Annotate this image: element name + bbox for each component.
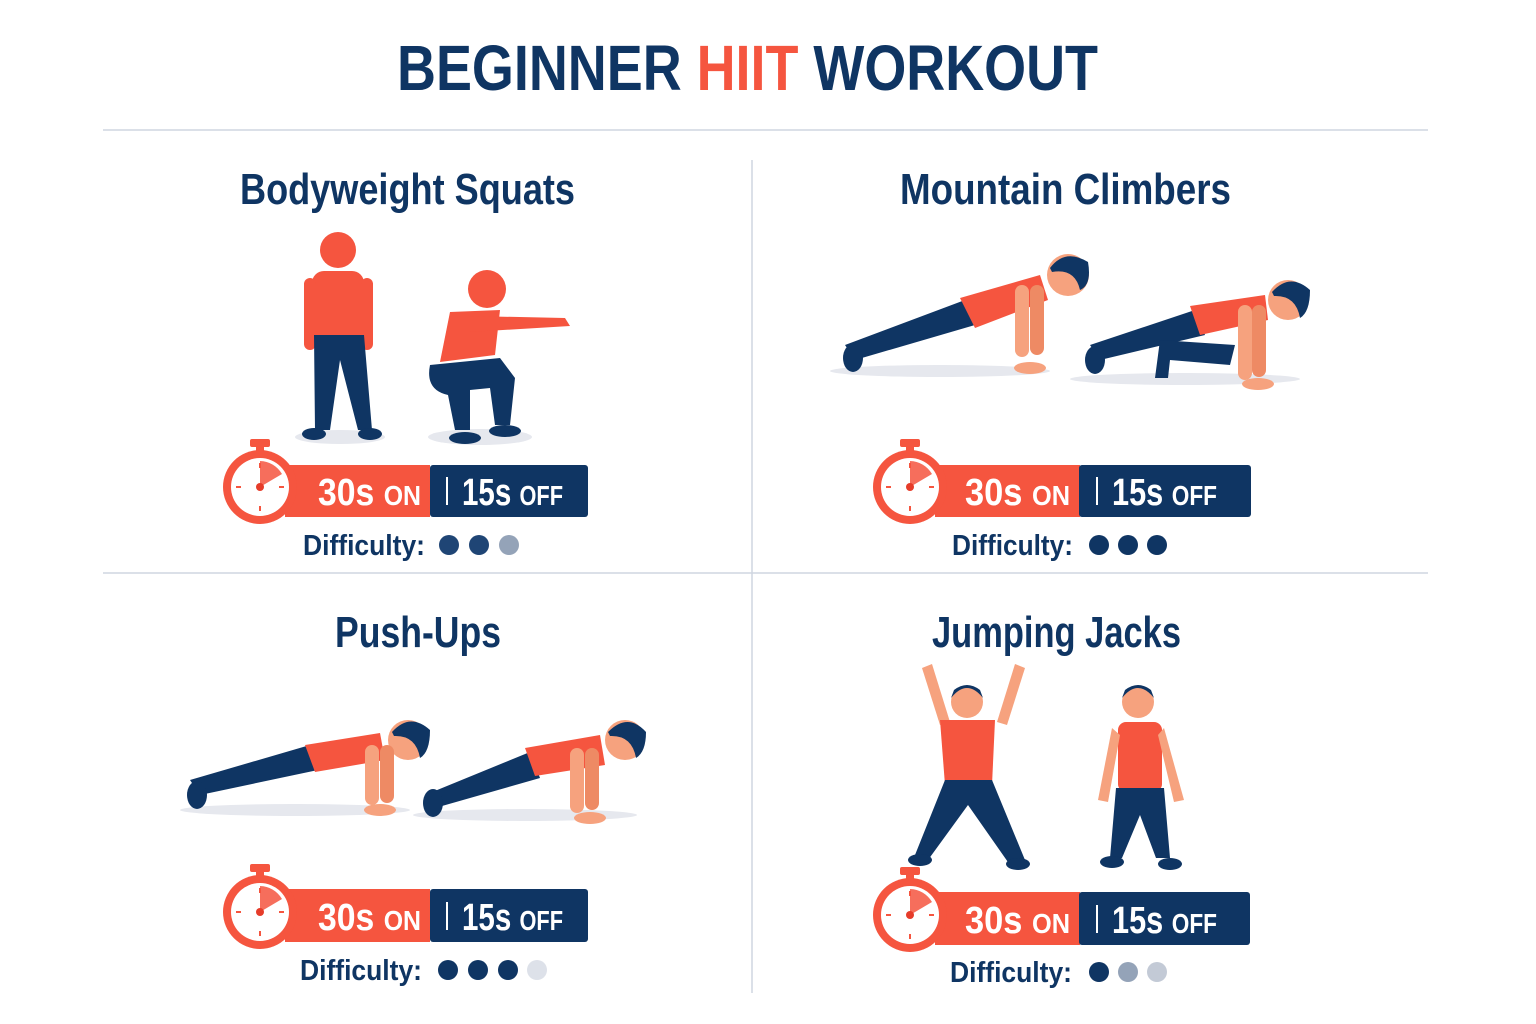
difficulty rating bbox=[300, 955, 547, 987]
timer bar: 15s OFF bbox=[1112, 900, 1217, 942]
panel: mountain climbers bbox=[830, 165, 1310, 562]
panel: bodyweight squats bbox=[223, 165, 588, 562]
figure: standing and squatting bbox=[295, 232, 570, 445]
heading: push-ups: Push-Ups bbox=[335, 608, 501, 657]
timer bar: 30s ON bbox=[318, 472, 421, 514]
difficulty rating bbox=[950, 957, 1167, 989]
difficulty rating bbox=[303, 530, 519, 562]
figure: push-ups bbox=[180, 720, 646, 824]
timer bar: 30s ON bbox=[965, 900, 1070, 942]
timer bar bbox=[873, 867, 1250, 952]
timer bar: 30s ON bbox=[965, 472, 1070, 514]
panel: jumping jacks bbox=[873, 608, 1250, 989]
figure: mountain climbers bbox=[830, 254, 1310, 390]
timer bar: 15s OFF bbox=[1112, 472, 1217, 514]
difficulty rating: Difficulty: bbox=[952, 530, 1073, 562]
timer bar: 30s ON bbox=[318, 897, 421, 939]
difficulty rating: Difficulty: bbox=[303, 530, 425, 562]
title: BEGINNER HIIT WORKOUT bbox=[397, 32, 1098, 104]
timer bar bbox=[873, 439, 1251, 524]
timer bar: 15s OFF bbox=[462, 472, 563, 514]
timer bar bbox=[223, 439, 588, 524]
heading: bodyweight squats: Bodyweight Squats bbox=[240, 165, 575, 214]
panel: push-ups bbox=[180, 608, 646, 987]
heading: mountain climbers: Mountain Climbers bbox=[900, 165, 1231, 214]
heading: jumping jacks: Jumping Jacks bbox=[932, 608, 1181, 657]
difficulty rating: Difficulty: bbox=[950, 957, 1072, 989]
timer bar: 15s OFF bbox=[462, 897, 563, 939]
timer bar bbox=[223, 864, 588, 949]
difficulty rating bbox=[952, 530, 1167, 562]
figure: jumping jacks bbox=[908, 664, 1184, 870]
difficulty rating: Difficulty: bbox=[300, 955, 422, 987]
